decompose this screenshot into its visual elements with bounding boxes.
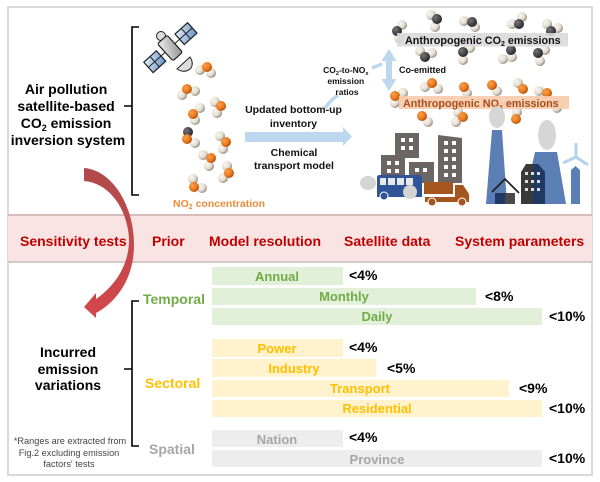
arrow: model to emissions bbox=[245, 127, 352, 146]
text: CO2-to-NOx emission ratios: 2 bbox=[336, 71, 339, 77]
bar chart: sectoral: Residential bbox=[342, 401, 412, 416]
text: incurred emission variations: variations bbox=[35, 377, 101, 393]
bar chart: sectoral: Industry bbox=[268, 361, 320, 376]
text: updated bottom-up inventory: Updated bottom-up bbox=[245, 104, 342, 116]
values: percent labels: <9% bbox=[519, 380, 548, 396]
molecules: CO2 upper bbox=[392, 10, 563, 43]
label: spatial: Spatial bbox=[149, 441, 195, 457]
arrow: ratios connector bbox=[325, 95, 338, 108]
values: percent labels bbox=[349, 267, 586, 466]
bar chart: sectoral: Power bbox=[257, 341, 297, 356]
molecules: NO2 concentration bbox=[177, 62, 234, 193]
icon: city buildings bbox=[381, 133, 462, 183]
heading: system title: 2 bbox=[42, 123, 47, 133]
icon: exhaust smoke right bbox=[403, 185, 417, 199]
footnote: *Ranges are extracted from bbox=[14, 436, 127, 446]
values: percent labels: <10% bbox=[549, 400, 586, 416]
text: chemical transport model: Chemical bbox=[271, 147, 317, 159]
text: CO2-to-NOx emission ratios: -to-NO bbox=[339, 65, 366, 75]
icon: bus bbox=[377, 175, 422, 200]
values: percent labels: <10% bbox=[549, 308, 586, 324]
heading: system title: Air pollution bbox=[25, 81, 107, 97]
bar chart: temporal: Annual bbox=[255, 269, 299, 284]
heading: system title: CO bbox=[21, 115, 111, 133]
text: co-emitted: Co-emitted bbox=[399, 65, 446, 75]
values: percent labels: <4% bbox=[349, 339, 378, 355]
arrow: co-emitted double bbox=[382, 49, 396, 91]
molecules: CO2 lower bbox=[415, 43, 550, 66]
icon: house bbox=[492, 179, 519, 204]
text: updated bottom-up inventory: inventory bbox=[270, 118, 317, 130]
bar chart: sectoral bbox=[212, 339, 542, 417]
label: anthropogenic NOx emissions: emissions bbox=[503, 98, 559, 110]
bar chart: temporal: Daily bbox=[361, 309, 393, 324]
label: anthropogenic NOx emissions: x bbox=[499, 104, 503, 111]
label: anthropogenic NOx emissions bbox=[399, 96, 569, 111]
bar chart: temporal: Monthly bbox=[319, 289, 370, 304]
footnote: factors' tests bbox=[43, 459, 95, 469]
text: incurred emission variations: Incurred bbox=[40, 344, 96, 360]
bar chart: temporal bbox=[212, 267, 542, 325]
label: sectoral: Sectoral bbox=[145, 375, 200, 391]
label: model resolution: Model resolution bbox=[209, 233, 321, 249]
heading: system title: satellite-based bbox=[17, 98, 115, 114]
label: system parameters: System parameters bbox=[455, 233, 584, 249]
text: CO2-to-NOx emission ratios: emission bbox=[327, 76, 364, 86]
bar chart: spatial: Province bbox=[350, 452, 404, 467]
molecules: NOx upper bbox=[390, 78, 562, 113]
label: anthropogenic CO2 emissions: Anthropogenic CO bbox=[405, 35, 501, 47]
label: NO2 concentration: 2 bbox=[189, 204, 193, 211]
text: CO2-to-NOx emission ratios: ratios bbox=[335, 87, 359, 97]
text: chemical transport model: transport model bbox=[254, 160, 334, 172]
text: CO2-to-NOx emission ratios: CO bbox=[323, 65, 369, 77]
label: satellite data: Satellite data bbox=[344, 233, 431, 249]
values: percent labels: <8% bbox=[485, 288, 514, 304]
text: incurred emission variations: emission bbox=[38, 361, 98, 377]
bar chart: sectoral: Transport bbox=[330, 381, 391, 396]
icon: apartment block bbox=[521, 164, 545, 204]
values: percent labels: <10% bbox=[549, 450, 586, 466]
icon: exhaust smoke left bbox=[360, 176, 376, 190]
band: sensitivity tests bbox=[8, 215, 592, 262]
label: temporal: Temporal bbox=[143, 291, 205, 307]
footnote: Fig.2 excluding emission bbox=[19, 448, 119, 458]
label: sensitivity tests: Sensitivity tests bbox=[20, 233, 127, 249]
heading: system title: inversion system bbox=[11, 132, 125, 148]
icon: truck bbox=[424, 182, 469, 206]
label: NO2 concentration: NO bbox=[173, 198, 189, 210]
bar chart: spatial: Nation bbox=[257, 432, 297, 447]
values: percent labels: <5% bbox=[387, 360, 416, 376]
molecules: NOx lower bbox=[417, 107, 522, 127]
bracket: bottom bbox=[124, 301, 139, 446]
icon: wind turbine bbox=[563, 143, 588, 204]
values: percent labels: <4% bbox=[349, 429, 378, 445]
bracket: top bbox=[124, 27, 139, 195]
label: anthropogenic CO2 emissions: emissions bbox=[505, 35, 561, 47]
label: anthropogenic NOx emissions: Anthropogenic NO bbox=[403, 98, 499, 110]
label: anthropogenic CO2 emissions bbox=[397, 33, 568, 48]
bar chart: spatial bbox=[212, 430, 542, 467]
label: prior: Prior bbox=[152, 233, 185, 249]
values: percent labels: <4% bbox=[349, 267, 378, 283]
text: CO2-to-NOx emission ratios: x bbox=[365, 71, 369, 77]
icon: factory and cooling tower bbox=[486, 130, 566, 204]
arrow: curved sensitivity to variations bbox=[84, 168, 134, 318]
heading: system title: emission bbox=[47, 115, 111, 131]
icon: factory chimney smoke bbox=[489, 106, 556, 150]
icon: satellite bbox=[141, 19, 200, 76]
label: anthropogenic CO2 emissions: 2 bbox=[501, 41, 505, 48]
label: NO2 concentration: concentration bbox=[193, 198, 265, 210]
